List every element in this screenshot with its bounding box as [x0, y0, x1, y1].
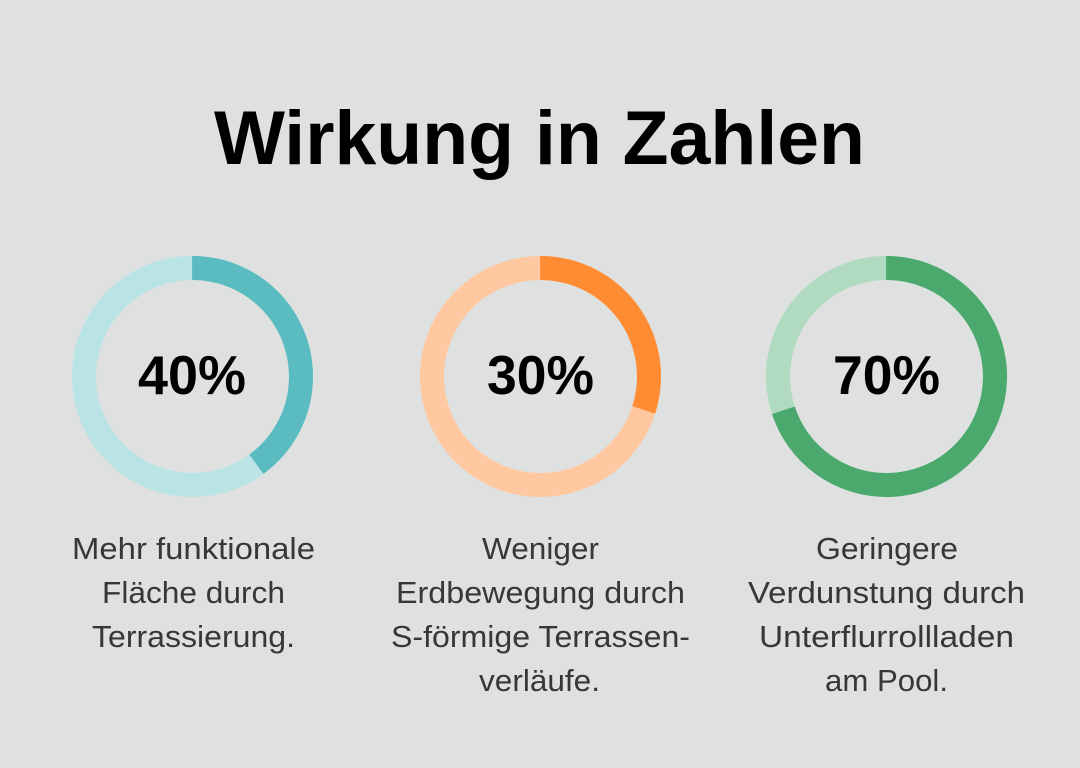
text: description 40%: Terrassierung. — [92, 619, 295, 654]
value: 40%: 40% — [138, 344, 246, 406]
text: description 40%: Fläche durch — [102, 575, 285, 610]
text: description 70%: am Pool. — [825, 663, 948, 698]
donut chart: 70% — [778, 268, 995, 485]
text: description 30%: Weniger — [482, 531, 599, 566]
donut chart: 30% — [432, 268, 649, 485]
text: description 40%: Mehr funktionale — [72, 531, 315, 566]
donut chart: 40% — [84, 268, 301, 485]
value: 30%: 30% — [487, 344, 594, 406]
text: description 70% — [748, 531, 1025, 698]
panel: 70% — [748, 268, 1025, 698]
text: description 70%: Unterflurrollladen — [759, 619, 1014, 654]
text: description 70%: Geringere — [816, 531, 958, 566]
value: 70%: 70% — [833, 344, 940, 406]
text: description 30%: Erdbewegung durch — [396, 575, 685, 610]
text: description 30% — [391, 531, 690, 698]
text: description 30%: S-förmige Terrassen- — [391, 619, 690, 654]
text: description 40% — [72, 531, 315, 654]
panel: 40% — [72, 268, 315, 654]
panel: 30% — [391, 268, 690, 698]
title: Wirkung in Zahlen — [214, 96, 865, 181]
text: description 30%: verläufe. — [479, 663, 600, 698]
text: description 70%: Verdunstung durch — [748, 575, 1025, 610]
